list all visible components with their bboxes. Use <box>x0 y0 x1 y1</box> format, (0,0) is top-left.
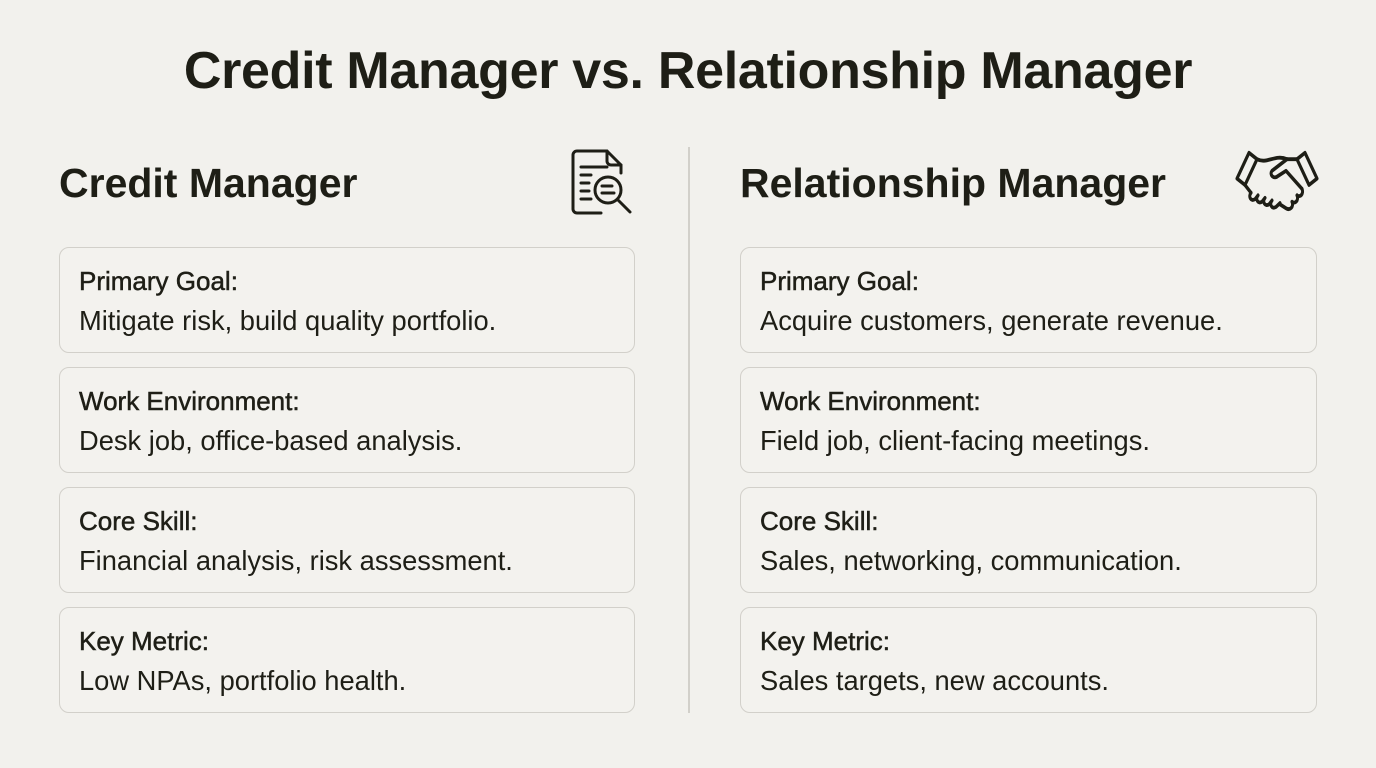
card: core skill: Financial analysis, risk assessment. <box>79 545 513 576</box>
card: work environment: Field job, client-facing meetings. <box>760 425 1150 456</box>
panel: credit manager cards <box>59 247 635 713</box>
card: core skill: Core Skill: <box>760 506 878 536</box>
heading: relationship manager: Relationship Manager <box>740 160 1166 206</box>
card: primary goal <box>740 247 1317 353</box>
card: work environment: Work Environment: <box>760 386 981 416</box>
title: Credit Manager vs. Relationship Manager <box>184 42 1192 100</box>
card: key metric: Low NPAs, portfolio health. <box>79 665 406 696</box>
card: work environment: Desk job, office-based analysis. <box>79 425 462 456</box>
icon: document search <box>572 150 632 214</box>
card: key metric <box>59 607 635 713</box>
card: work environment <box>59 367 635 473</box>
card: primary goal <box>59 247 635 353</box>
card: primary goal: Mitigate risk, build quality portfolio. <box>79 305 496 336</box>
card: work environment: Work Environment: <box>79 386 300 416</box>
card: primary goal: Primary Goal: <box>760 266 919 296</box>
card: key metric: Key Metric: <box>760 626 890 656</box>
card: primary goal: Primary Goal: <box>79 266 238 296</box>
card: core skill: Sales, networking, communication. <box>760 545 1182 576</box>
card: key metric: Key Metric: <box>79 626 209 656</box>
panel: relationship manager cards <box>740 247 1317 713</box>
card: core skill: Core Skill: <box>79 506 197 536</box>
card: key metric <box>740 607 1317 713</box>
icon: handshake <box>1235 150 1319 212</box>
card: key metric: Sales targets, new accounts. <box>760 665 1109 696</box>
card: work environment <box>740 367 1317 473</box>
card: primary goal: Acquire customers, generate revenue. <box>760 305 1223 336</box>
heading: credit manager: Credit Manager <box>59 160 357 206</box>
card: core skill <box>740 487 1317 593</box>
card: core skill <box>59 487 635 593</box>
